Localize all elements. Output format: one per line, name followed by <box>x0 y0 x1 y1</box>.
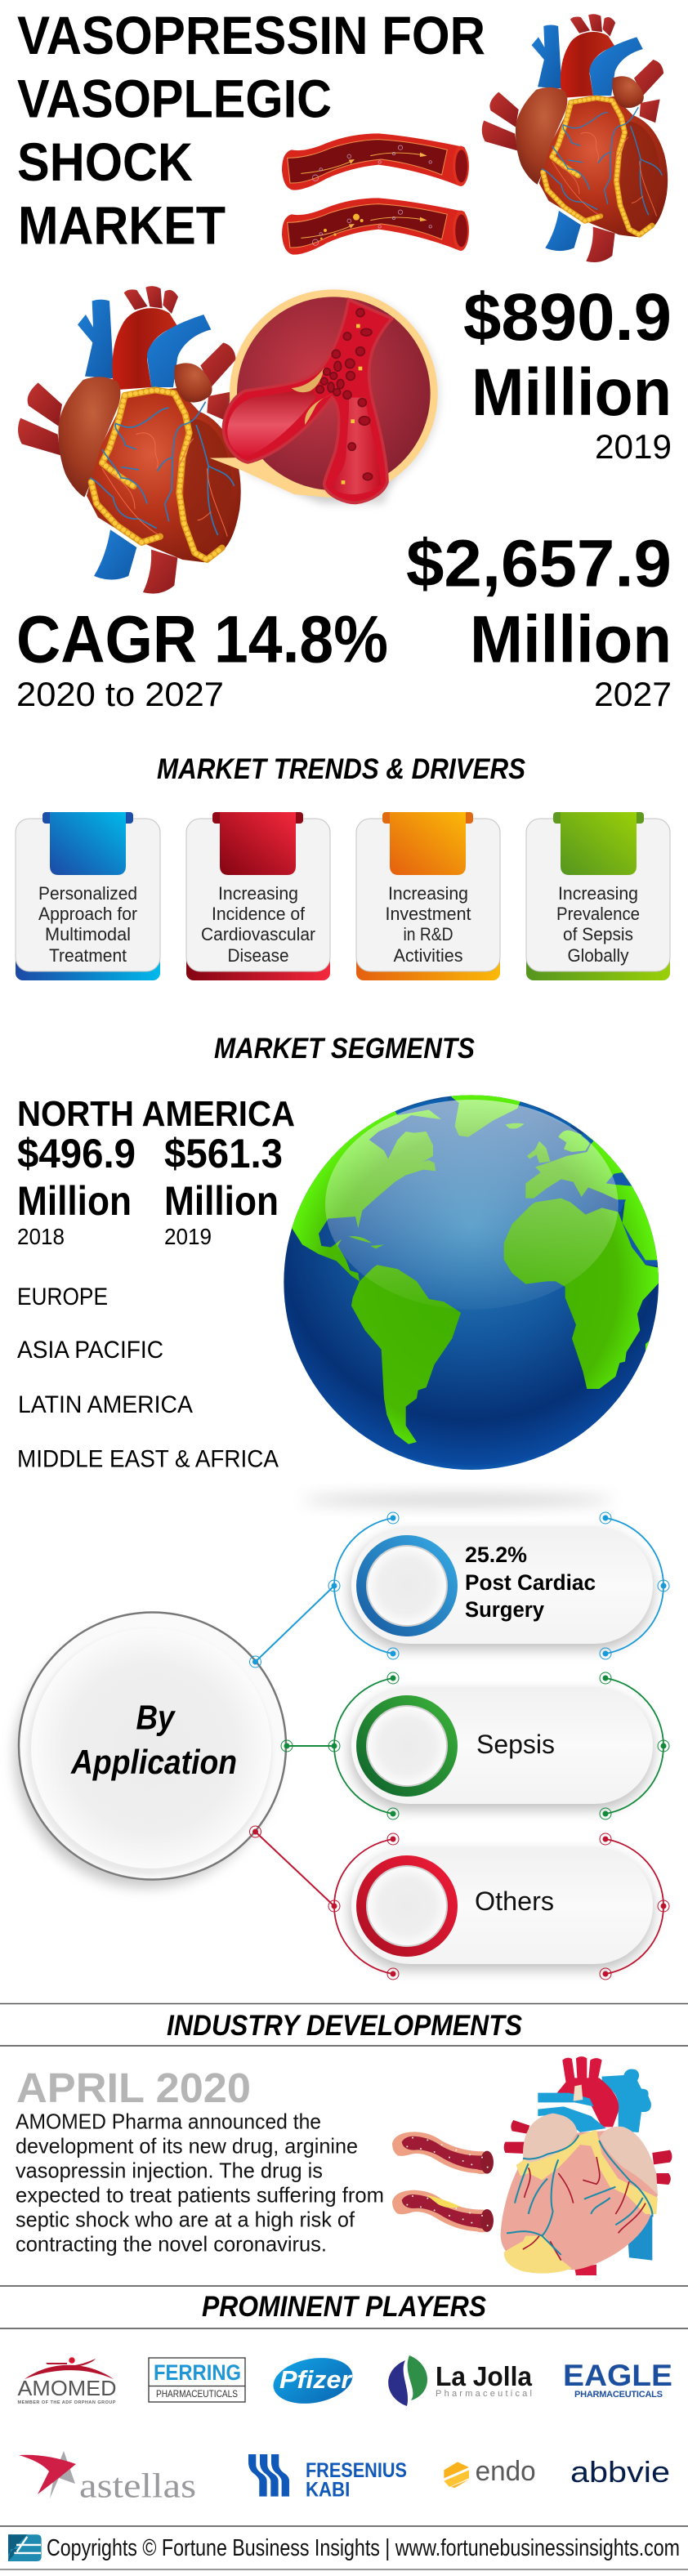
panel: by application hub: By <box>136 1699 176 1737</box>
card: personalized approach <box>16 812 160 980</box>
icon: blocked artery <box>392 2190 494 2232</box>
stat: 2027 value: $2,657.9 <box>406 526 672 601</box>
card: prevalence of sepsis <box>526 812 670 980</box>
logo: Astellas: astellas <box>79 2468 196 2506</box>
card: personalized approach: Multimodal <box>45 924 131 944</box>
logo: Pfizer: Pfizer <box>279 2365 353 2394</box>
logo: Ferring: FERRING <box>154 2360 241 2385</box>
panel: april 2020 development: vasopressin injection. The drug is <box>16 2159 323 2183</box>
logo: La Jolla: La Jolla <box>436 2361 533 2391</box>
panel: april 2020 development: contracting the novel coronavirus. <box>16 2232 327 2257</box>
logo: Ferring <box>149 2358 245 2402</box>
stat: CAGR: 2020 to 2027 <box>16 675 224 713</box>
panel: by application hub: Application <box>70 1743 237 1781</box>
icon: healthy artery <box>392 2132 494 2174</box>
panel: regional values: NORTH AMERICA <box>17 1094 295 1134</box>
stat: 2027 value: Million <box>470 603 672 676</box>
title: VASOPLEGIC <box>17 69 332 129</box>
icon: healthy blood vessel <box>282 133 469 190</box>
panel: april 2020 development <box>16 2065 384 2257</box>
icon: heart top right <box>482 14 668 262</box>
icon: blocked blood vessel <box>282 198 469 255</box>
card: prevalence of sepsis: Prevalence <box>556 904 640 924</box>
stat: 2019 value: Million <box>471 355 672 430</box>
card: personalized approach: Personalized <box>38 883 137 904</box>
title: SHOCK <box>17 132 193 192</box>
card: cardiovascular disease <box>186 812 330 980</box>
heading: prominent players: PROMINENT PLAYERS <box>202 2291 486 2323</box>
title: MARKET <box>18 194 226 255</box>
heading: industry developments: INDUSTRY DEVELOPMENTS <box>167 2010 522 2042</box>
panel: regional values: EUROPE <box>17 1284 108 1310</box>
logo: Fresenius Kabi: FRESENIUS <box>306 2459 407 2482</box>
logo: La Jolla: Pharmaceutical <box>436 2389 532 2399</box>
panel: post cardiac surgery: 25.2% <box>465 1542 527 1567</box>
logo: Endo <box>444 2456 536 2488</box>
icon: cartoon heart <box>501 2056 672 2275</box>
stat: CAGR: CAGR 14.8% <box>16 603 388 676</box>
card: prevalence of sepsis: of Sepsis <box>563 924 633 944</box>
card: R&D investment <box>356 812 500 980</box>
stat: 2019 value: $890.9 <box>463 280 672 355</box>
panel: others <box>250 1826 669 1980</box>
title <box>17 5 485 255</box>
panel: regional values <box>17 1094 295 1472</box>
card: cardiovascular disease: Incidence of <box>212 904 306 924</box>
card: prevalence of sepsis: Globally <box>567 945 629 966</box>
logo: Fresenius Kabi: KABI <box>306 2478 350 2501</box>
stat: CAGR <box>16 603 388 713</box>
connector: blue <box>255 1586 334 1662</box>
panel: post cardiac surgery: Surgery <box>465 1597 544 1622</box>
title: VASOPRESSIN FOR <box>17 5 485 65</box>
panel: post cardiac surgery: Post Cardiac <box>465 1570 596 1595</box>
heading: market trends and drivers: MARKET TRENDS & DRIVERS <box>157 753 525 785</box>
logo: Pfizer <box>270 2352 356 2409</box>
card: cardiovascular disease: Disease <box>227 945 289 966</box>
panel: post cardiac surgery <box>250 1512 669 1667</box>
stat: 2027 value <box>406 526 672 713</box>
icon: magnified artery <box>210 289 440 504</box>
panel: regional values: $496.9 <box>17 1131 136 1176</box>
panel: others: Others <box>475 1886 554 1916</box>
card: cardiovascular disease: Increasing <box>218 883 298 904</box>
logo: Eagle: EAGLE <box>563 2359 672 2392</box>
stat: 2027 value: 2027 <box>594 675 672 713</box>
card: cardiovascular disease: Cardiovascular <box>201 924 315 944</box>
heading: market segments: MARKET SEGMENTS <box>214 1033 475 1065</box>
panel: regional values: $561.3 <box>164 1131 283 1176</box>
panel: regional values: Million <box>164 1178 279 1224</box>
logo: Eagle: PHARMACEUTICALS <box>574 2390 663 2400</box>
stat: 2019 value: 2019 <box>595 427 672 466</box>
card: R&D investment: Increasing <box>388 883 468 904</box>
logo: Astellas <box>19 2451 196 2506</box>
panel: april 2020 development: septic shock who are at a high risk of <box>16 2208 355 2232</box>
logo: Endo: endo <box>476 2456 536 2487</box>
panel: by application hub <box>15 1613 286 1887</box>
panel: regional values: 2018 <box>17 1224 65 1249</box>
panel: april 2020 development: AMOMED Pharma announced the <box>16 2109 321 2134</box>
logo: Ferring: PHARMACEUTICALS <box>156 2388 238 2400</box>
logo: Fresenius Kabi <box>248 2454 407 2501</box>
panel: regional values: LATIN AMERICA <box>18 1391 193 1418</box>
icon: large heart <box>18 286 241 594</box>
panel: regional values: Million <box>17 1178 132 1224</box>
globe shadow <box>302 1494 613 1506</box>
stat: 2019 value <box>463 280 672 466</box>
icon: fortune business insights logo <box>8 2534 42 2561</box>
panel: regional values: 2019 <box>164 1224 212 1249</box>
panel: april 2020 development: development of its new drug, arginine <box>16 2134 358 2159</box>
card: personalized approach: Treatment <box>49 945 127 966</box>
connector: green <box>287 1745 334 1747</box>
card: prevalence of sepsis: Increasing <box>558 883 638 904</box>
logo: AbbVie: abbvie <box>570 2455 670 2489</box>
card: R&D investment: Investment <box>386 904 471 924</box>
logo: AMOMED: AMOMED <box>18 2376 116 2400</box>
panel: sepsis <box>281 1672 669 1819</box>
connector: red <box>255 1832 334 1906</box>
logo: La Jolla <box>388 2355 533 2406</box>
logo: AMOMED: MEMBER OF THE ADF ORPHAN GROUP <box>18 2400 116 2405</box>
panel: april 2020 development: expected to treat patients suffering from <box>16 2183 384 2208</box>
card: R&D investment: in R&D <box>404 924 453 944</box>
panel: april 2020 development: APRIL 2020 <box>16 2065 251 2111</box>
panel: driver cards <box>16 812 670 980</box>
icon: globe <box>278 1091 686 1470</box>
logo: AMOMED <box>18 2357 116 2405</box>
panel: regional values: ASIA PACIFIC <box>17 1337 163 1364</box>
panel: regional values: MIDDLE EAST & AFRICA <box>17 1446 279 1472</box>
card: personalized approach: Approach for <box>38 904 137 924</box>
panel: sepsis: Sepsis <box>476 1730 555 1759</box>
card: R&D investment: Activities <box>394 945 462 966</box>
